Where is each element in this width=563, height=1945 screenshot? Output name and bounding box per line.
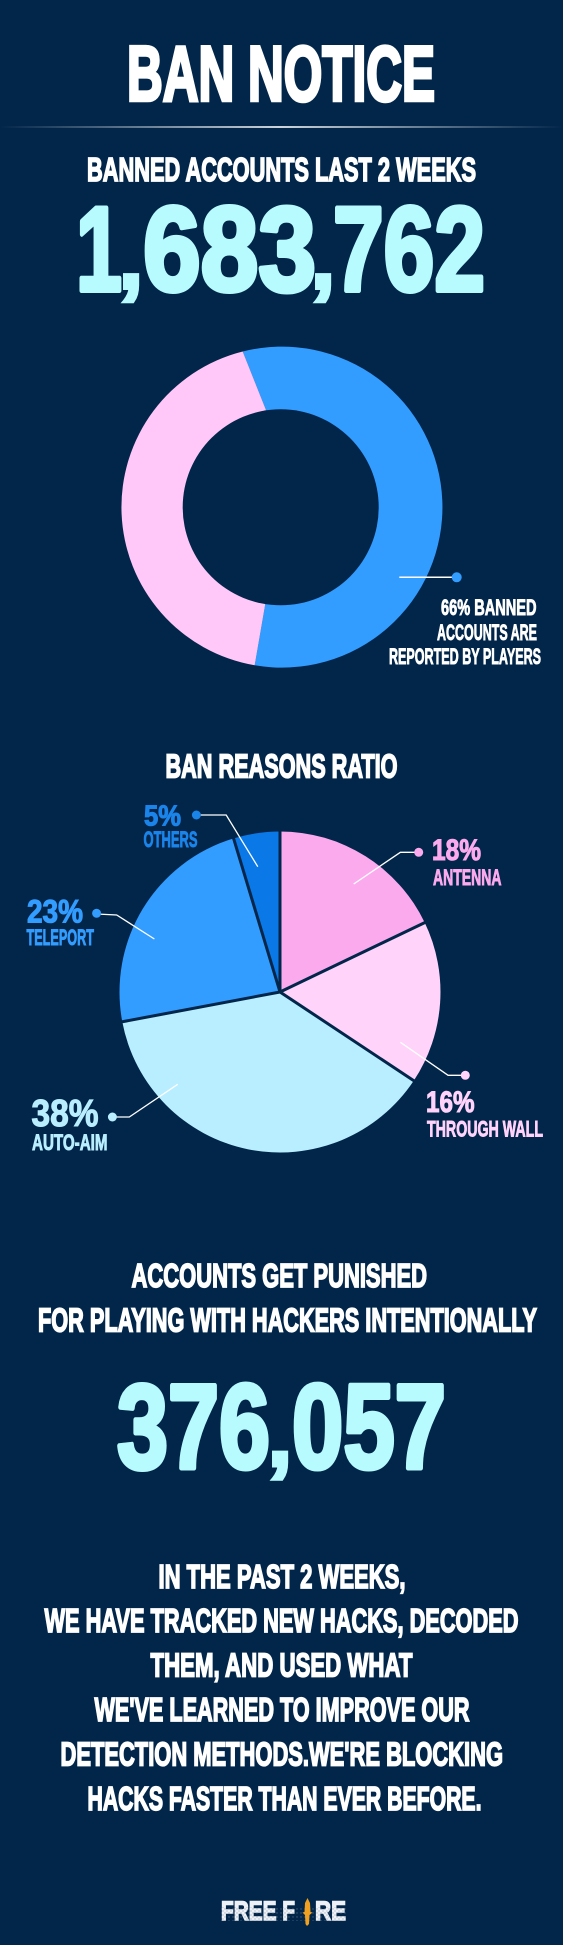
icon: knife xyxy=(302,1898,312,1926)
callout: through wall xyxy=(400,1042,543,1142)
heading: ban reasons: BAN REASONS RATIO xyxy=(166,748,398,784)
slice: auto-aim xyxy=(122,992,414,1152)
callout: others: OTHERS xyxy=(144,827,198,852)
number: banned accounts: 762 xyxy=(333,182,485,316)
callout: others: 5% xyxy=(144,800,181,832)
number: banned accounts: 1 xyxy=(76,182,122,316)
text block: summary xyxy=(44,1558,518,1817)
text block: summary: IN THE PAST 2 WEEKS, xyxy=(158,1558,406,1595)
donut segment: reported by players xyxy=(243,347,442,668)
heading: punished accounts: ACCOUNTS GET PUNISHED xyxy=(132,1257,427,1294)
text block: summary: THEM, AND USED WHAT xyxy=(150,1646,412,1684)
heading: punished accounts xyxy=(38,1257,537,1338)
callout: teleport xyxy=(26,894,154,950)
callout: others xyxy=(144,800,258,867)
donut leader line xyxy=(399,572,462,582)
callout: through wall: 16% xyxy=(426,1086,474,1119)
donut label xyxy=(389,595,541,669)
callout: antenna: 18% xyxy=(432,834,481,867)
number: punished accounts xyxy=(117,1360,446,1494)
logo: Free Fire: FREE F xyxy=(221,1896,295,1926)
callout: auto-aim xyxy=(32,1084,178,1155)
callout: auto-aim: AUTO-AIM xyxy=(32,1130,108,1155)
logo: Free Fire: RE xyxy=(315,1896,346,1926)
callout: antenna: ANTENNA xyxy=(433,865,502,890)
number: punished accounts: 057 xyxy=(292,1360,446,1494)
donut segment: other xyxy=(121,352,266,665)
number: banned accounts xyxy=(76,182,485,316)
callout: auto-aim: 38% xyxy=(32,1093,98,1135)
number: banned accounts: , xyxy=(119,211,143,307)
callout: teleport: 23% xyxy=(27,894,83,930)
number: banned accounts: 683 xyxy=(143,182,316,316)
callout: teleport: TELEPORT xyxy=(26,925,94,950)
number: banned accounts: , xyxy=(311,211,335,307)
slice: others xyxy=(234,832,280,992)
callout: antenna xyxy=(354,834,502,890)
slice: through wall xyxy=(280,923,440,1081)
slice: teleport xyxy=(119,838,280,1022)
number: punished accounts: , xyxy=(268,1388,292,1484)
donut chart: reported accounts xyxy=(121,347,541,669)
slice: antenna xyxy=(280,832,425,992)
pie chart: ban reasons xyxy=(119,830,440,1152)
number: punished accounts: 376 xyxy=(117,1360,270,1494)
